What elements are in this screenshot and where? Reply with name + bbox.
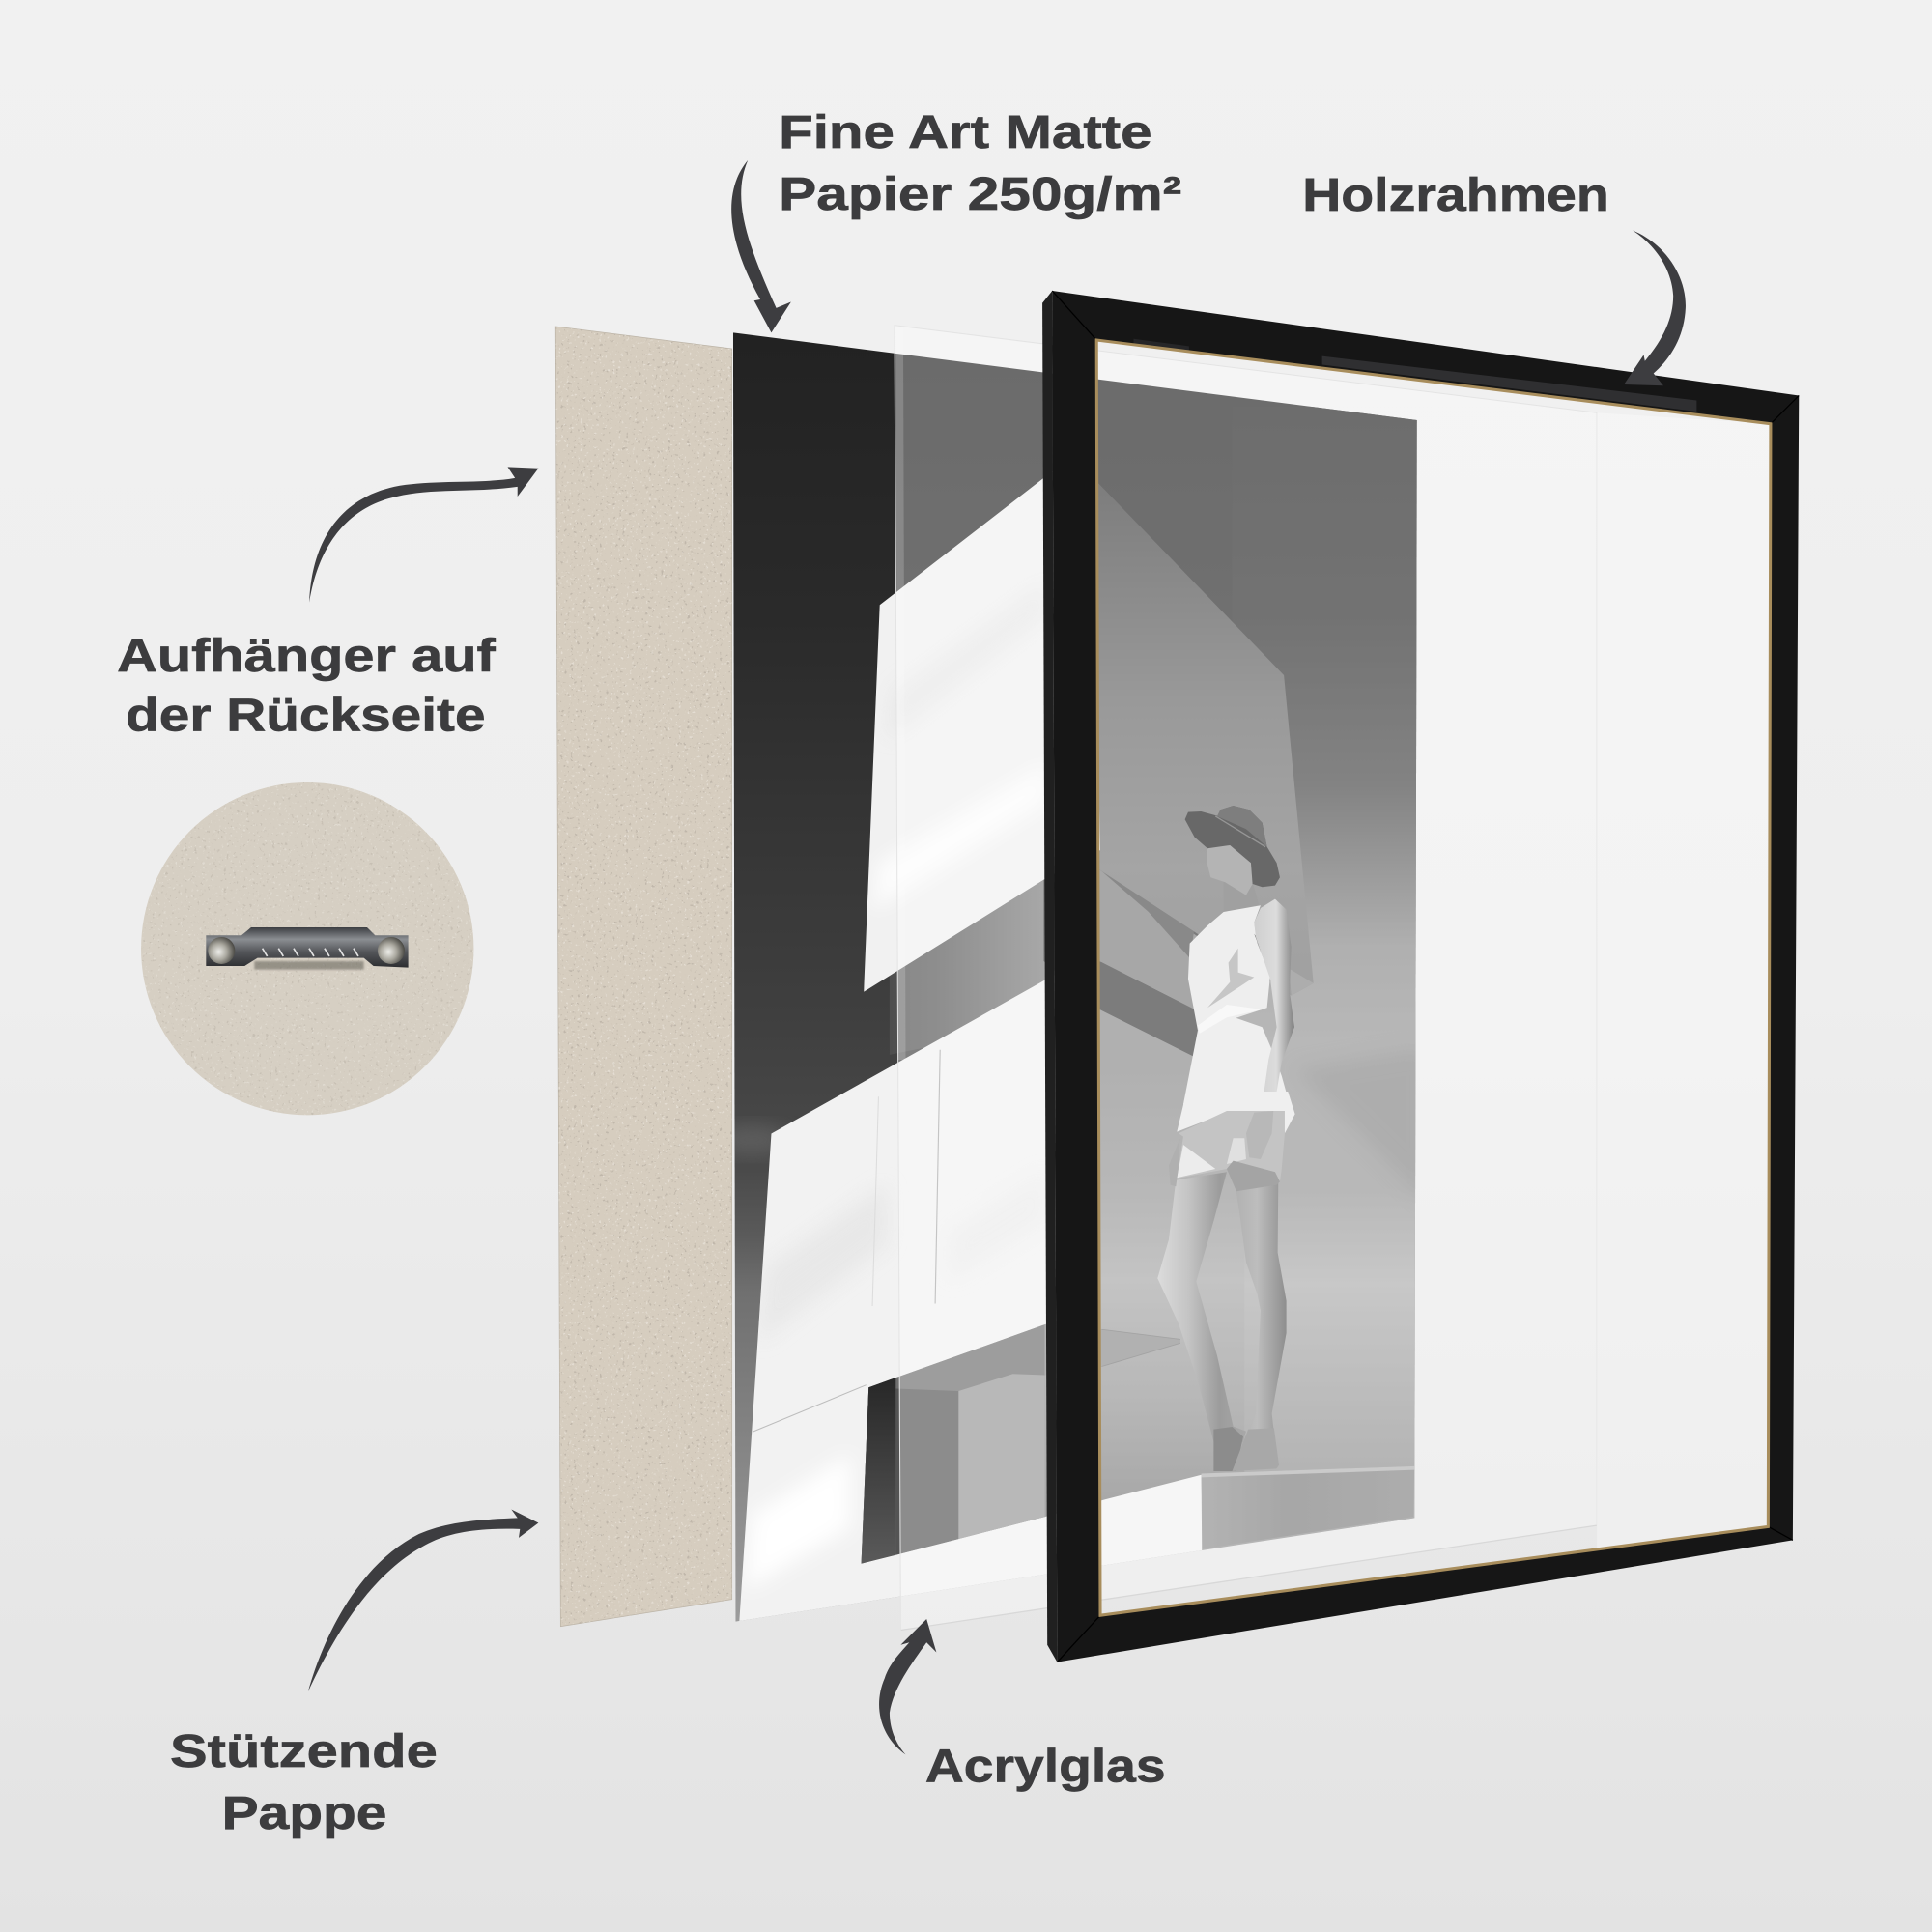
figure upper body <box>1183 806 1294 1104</box>
skirt underside <box>1177 1111 1285 1181</box>
underside band dark <box>1099 962 1194 1056</box>
left shoe <box>1213 1427 1243 1471</box>
label: acrylic glass: Acrylglas <box>925 1740 1166 1792</box>
recess in the lower block <box>862 1324 1045 1564</box>
frame reflection strip <box>1322 356 1696 412</box>
label: fine art paper: Papier 250g/m² <box>779 168 1181 220</box>
arrow: to cardboard top <box>309 467 538 603</box>
skirt upper <box>1183 1016 1290 1104</box>
panel: supporting cardboard <box>555 327 732 1627</box>
figure lower body <box>1157 1092 1295 1442</box>
figure: woman with hat <box>1157 806 1295 1471</box>
hand <box>1246 1111 1273 1159</box>
left leg <box>1157 1172 1246 1442</box>
face <box>1208 840 1253 895</box>
arrow: to cardboard bottom <box>308 1509 538 1691</box>
ceiling inside frame <box>1045 1324 1180 1375</box>
dress top <box>1188 905 1270 1031</box>
label: supporting cardboard: Pappe <box>222 1787 387 1839</box>
platform <box>1202 1470 1405 1542</box>
label: hanger on the back: der Rückseite <box>126 689 486 741</box>
cloud at the left edge <box>734 1122 779 1156</box>
label: supporting cardboard: Stützende <box>170 1725 438 1777</box>
hat <box>1185 806 1280 887</box>
gap between the blocks <box>890 880 1043 1055</box>
label: hanger on the back <box>117 630 497 741</box>
right shoe <box>1233 1428 1279 1471</box>
label: fine art paper <box>779 106 1181 220</box>
arm <box>1254 899 1294 1104</box>
label: wooden frame: Holzrahmen <box>1302 169 1609 221</box>
skirt hem <box>1177 1092 1295 1133</box>
label: fine art paper: Fine Art Matte <box>779 106 1152 158</box>
arrow: to acrylic glass <box>879 1619 936 1754</box>
label: hanger on the back: Aufhänger auf <box>117 630 497 682</box>
neck <box>1224 881 1259 913</box>
upper block front face <box>864 471 1100 992</box>
left hand <box>1169 1138 1180 1186</box>
lower wall behind the figure <box>1043 961 1244 1528</box>
underside band light <box>1099 869 1197 1009</box>
icon: sawtooth hanger on cardboard circle <box>141 782 473 1115</box>
lower block front face <box>739 976 1202 1621</box>
panel: acrylic glass <box>895 326 1597 1631</box>
arrow: to print <box>731 160 791 332</box>
panel: black wooden frame <box>1042 291 1799 1662</box>
upper block side face <box>1098 483 1314 995</box>
label: supporting cardboard <box>170 1725 438 1839</box>
arrow: to frame <box>1624 231 1686 385</box>
gold inner edge <box>1096 340 1771 1615</box>
right leg <box>1234 1172 1287 1442</box>
glass sheen on the right of the frame <box>1597 412 1771 1550</box>
panel: fine art print photograph <box>715 321 1430 1651</box>
